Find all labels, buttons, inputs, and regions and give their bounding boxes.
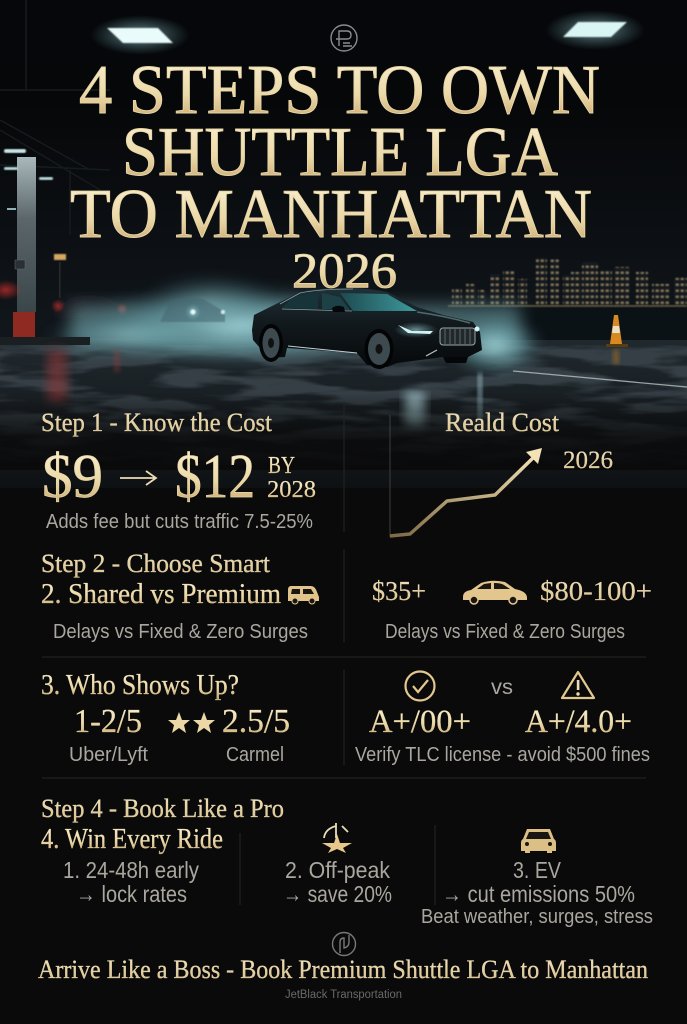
- panel: step 4 book like a pro: [41, 794, 653, 928]
- ceiling beams: [0, 0, 110, 235]
- grade: left: A+/00+: [369, 704, 471, 740]
- tip 3: 3. EV: [513, 857, 562, 883]
- top logo: [331, 25, 357, 51]
- tip 2: → save 20%: [283, 881, 392, 907]
- tip 1: → lock rates: [76, 881, 187, 907]
- bottom logo: [332, 932, 356, 956]
- curb: [0, 337, 90, 345]
- big price change: $12: [175, 443, 255, 511]
- arrow: price increase: [120, 471, 156, 485]
- grade: right: A+/4.0+: [525, 704, 632, 740]
- tip 1: 1. 24-48h early: [63, 857, 199, 883]
- fog and spray: [40, 272, 545, 377]
- vs label: vs: [491, 676, 513, 699]
- title: 2026: [292, 242, 397, 298]
- chart heading: Reald Cost: [445, 408, 560, 437]
- title: SHUTTLE LGA: [122, 114, 558, 191]
- icon: check circle: [406, 672, 434, 700]
- black sedan: [252, 288, 482, 369]
- ceiling lights: [90, 10, 645, 55]
- pillar with lamps and red base: [4, 149, 53, 337]
- panel: step 2 choose smart: [41, 549, 652, 643]
- brand name: JetBlack Transportation: [285, 989, 402, 1001]
- title: TO MANHATTAN: [70, 176, 592, 253]
- distant lamp post: [54, 254, 66, 298]
- heading: step 3: 3. Who Shows Up?: [41, 670, 239, 701]
- note: premium: Delays vs Fixed & Zero Surges: [385, 621, 625, 643]
- big price change: BY: [268, 453, 295, 479]
- panel: step 1 know the cost: [41, 408, 316, 533]
- icon: warning triangle: [562, 672, 594, 698]
- tip 3: Beat weather, surges, stress: [421, 906, 653, 928]
- rising line with arrow: [390, 448, 542, 536]
- panel: step 3 who shows up: [41, 670, 650, 766]
- tip 2: 2. Off-peak: [285, 857, 390, 883]
- heading: step 4: Step 4 - Book Like a Pro: [41, 794, 284, 823]
- tip 1: [63, 857, 199, 907]
- heading: step 1: Step 1 - Know the Cost: [41, 408, 273, 437]
- rating: uber/lyft: 1-2/5: [74, 703, 142, 740]
- rating: carmel: [222, 703, 290, 766]
- city skyline: [448, 258, 687, 307]
- right embankment wall: [440, 306, 687, 340]
- title: 4 STEPS TO OWN: [79, 52, 600, 129]
- traffic cone: [606, 315, 628, 347]
- panel: real cost chart: [390, 408, 613, 537]
- wet road reflections: [47, 350, 687, 428]
- rating: carmel: 2.5/5: [222, 703, 290, 740]
- shared price: $35+: [372, 576, 426, 606]
- icon: car front: [521, 829, 556, 853]
- icon: two stars: [168, 712, 215, 733]
- subheading: shared vs premium: 2. Shared vs Premium: [41, 578, 281, 610]
- subheading: win every ride: 4. Win Every Ride: [41, 824, 223, 855]
- icon: sedan: [463, 581, 527, 604]
- note: Adds fee but cuts traffic 7.5-25%: [46, 511, 313, 533]
- tip 3: [421, 857, 653, 928]
- note: shared: Delays vs Fixed & Zero Surges: [53, 621, 308, 643]
- big price change: $9: [42, 443, 103, 511]
- call to action: Arrive Like a Boss - Book Premium Shuttle LGA to Manhattan: [38, 955, 648, 984]
- headlight car in mist: [160, 297, 225, 322]
- background cars: [0, 280, 128, 318]
- note: verify license: Verify TLC license - avoid $500 fines: [355, 744, 650, 766]
- rating: carmel: Carmel: [226, 744, 284, 766]
- big price change: 2028: [267, 477, 316, 503]
- chart axis: [389, 415, 391, 537]
- icon: star with plane: [322, 823, 352, 853]
- dividers: [42, 405, 646, 905]
- premium price: $80-100+: [540, 576, 652, 606]
- chart year label: 2026: [563, 447, 613, 474]
- title: [70, 52, 600, 298]
- rating: uber/lyft: [69, 703, 148, 766]
- big price change: [42, 443, 316, 511]
- tip 2: [283, 857, 392, 907]
- heading: step 2: Step 2 - Choose Smart: [41, 549, 271, 578]
- icon: van: [288, 586, 319, 604]
- rating: uber/lyft: Uber/Lyft: [69, 744, 148, 766]
- tip 3: → cut emissions 50%: [442, 881, 635, 907]
